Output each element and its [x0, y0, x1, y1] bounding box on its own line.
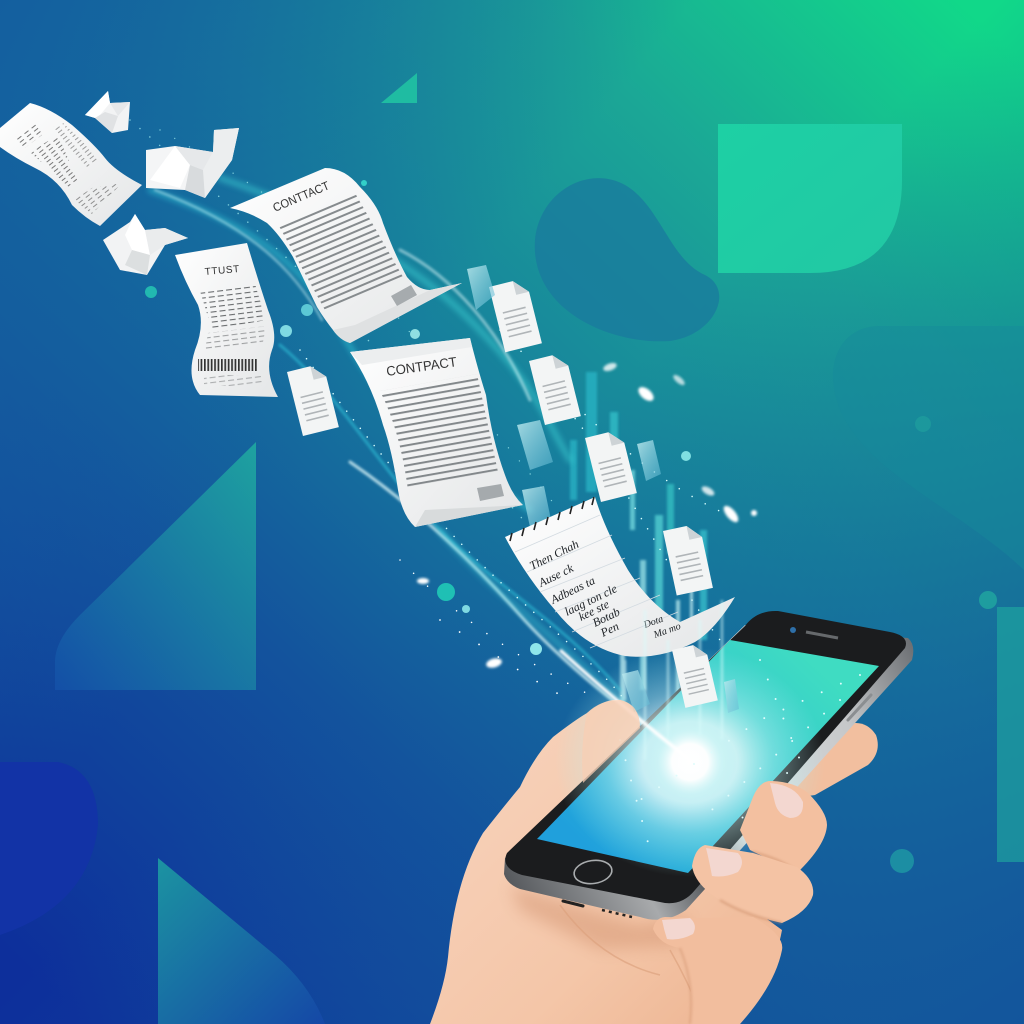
receipt footer text [204, 375, 262, 386]
shape: small top triangle [381, 73, 417, 103]
glass file 5 [622, 670, 650, 712]
finger shading [680, 948, 691, 1024]
spiral binding [510, 497, 594, 541]
paper: crumpled sheet with tail [146, 128, 239, 198]
handwritten notes: Dota [641, 614, 665, 631]
shape: faint circle [915, 416, 931, 432]
shape: lower right circle [890, 849, 914, 873]
small document 2 [489, 278, 542, 352]
finger: upper with nail [740, 781, 827, 873]
barcode [198, 359, 258, 371]
contract title: CONTTACT [271, 178, 332, 215]
small document 1 [287, 363, 339, 436]
paper: crumpled ball small [85, 91, 130, 133]
contract text lines [380, 374, 498, 490]
finger shading [720, 900, 782, 923]
small document 3 [529, 352, 581, 425]
glass file 4 [522, 486, 551, 527]
shape: bottom left blob [0, 762, 98, 935]
palm and thumb [430, 700, 782, 1024]
screen sparkles [620, 660, 860, 850]
sparkle dust [130, 120, 740, 720]
light streams [150, 178, 690, 760]
shape: right rectangle [997, 607, 1024, 862]
glow burst on screen [555, 600, 860, 877]
paper: long receipt top left [0, 103, 142, 226]
finger: lower with nail [653, 917, 782, 1024]
shape: dark blue blob [535, 178, 719, 341]
finger shading [752, 852, 797, 873]
thumb tip over phone [582, 700, 640, 783]
receipt heading: TTUST [204, 264, 240, 278]
paper: crumpled ball lower [103, 214, 188, 275]
document: second contract [350, 338, 523, 527]
palm crease [560, 905, 705, 1024]
phone black face [505, 611, 906, 903]
bright streak [560, 650, 690, 760]
contract stamp [391, 285, 417, 306]
contract stamp [477, 484, 504, 501]
receipt: itemised with barcode [175, 243, 278, 397]
small document 5 [663, 523, 713, 596]
finger: middle with nail [692, 845, 813, 923]
shape: rounded green square [718, 124, 902, 273]
contract title: CONTPACT [385, 354, 458, 379]
small document 4 [585, 429, 637, 502]
smartphone [504, 611, 913, 920]
shape: bottom triangle [158, 858, 325, 1024]
small document 6 [672, 643, 718, 708]
phone screen [537, 640, 879, 873]
glass file 1 [467, 265, 495, 310]
handwritten notes: Ause ck [535, 561, 576, 590]
side button [848, 695, 871, 720]
phone metal body [504, 625, 913, 920]
handwritten notes: Then Chah [527, 537, 581, 573]
fingernail [770, 783, 803, 818]
glowing flakes [417, 361, 757, 669]
floating teal dots [145, 180, 691, 655]
shape: right circle [979, 591, 997, 609]
light shafts [625, 600, 722, 760]
shape: large left triangle [55, 442, 256, 690]
handwritten notes: kee ste [576, 597, 612, 624]
notepad page with handwriting [505, 497, 735, 657]
home button [573, 858, 613, 886]
handwritten notes: Botab [590, 605, 622, 630]
handwritten notes: Ma mo [651, 621, 682, 641]
glass file 6 [724, 679, 739, 713]
glass file 3 [637, 440, 661, 481]
handwritten notes: Pen [597, 619, 621, 640]
document: first contract [230, 168, 462, 343]
handwritten notes: laag ton cle [562, 581, 620, 619]
charging port [563, 901, 583, 906]
contract text lines [279, 193, 403, 312]
notebook ruled lines [515, 515, 678, 648]
speaker holes [602, 910, 632, 917]
hand: palm and back finger behind phone [430, 700, 878, 1024]
receipt detail rows [205, 326, 266, 350]
handwritten notes [527, 537, 682, 641]
glass file 2 [517, 420, 553, 470]
handwritten notes: Adbeas ta [547, 573, 597, 607]
front camera [790, 627, 796, 633]
fingernail [706, 848, 742, 876]
shadow under phone [510, 885, 690, 950]
fingernail [662, 918, 695, 939]
receipt item rows [200, 284, 266, 330]
data light bars rising from phone [570, 372, 707, 720]
speaker [806, 632, 838, 638]
back finger [780, 723, 878, 800]
shape: large right blob [833, 326, 1024, 570]
